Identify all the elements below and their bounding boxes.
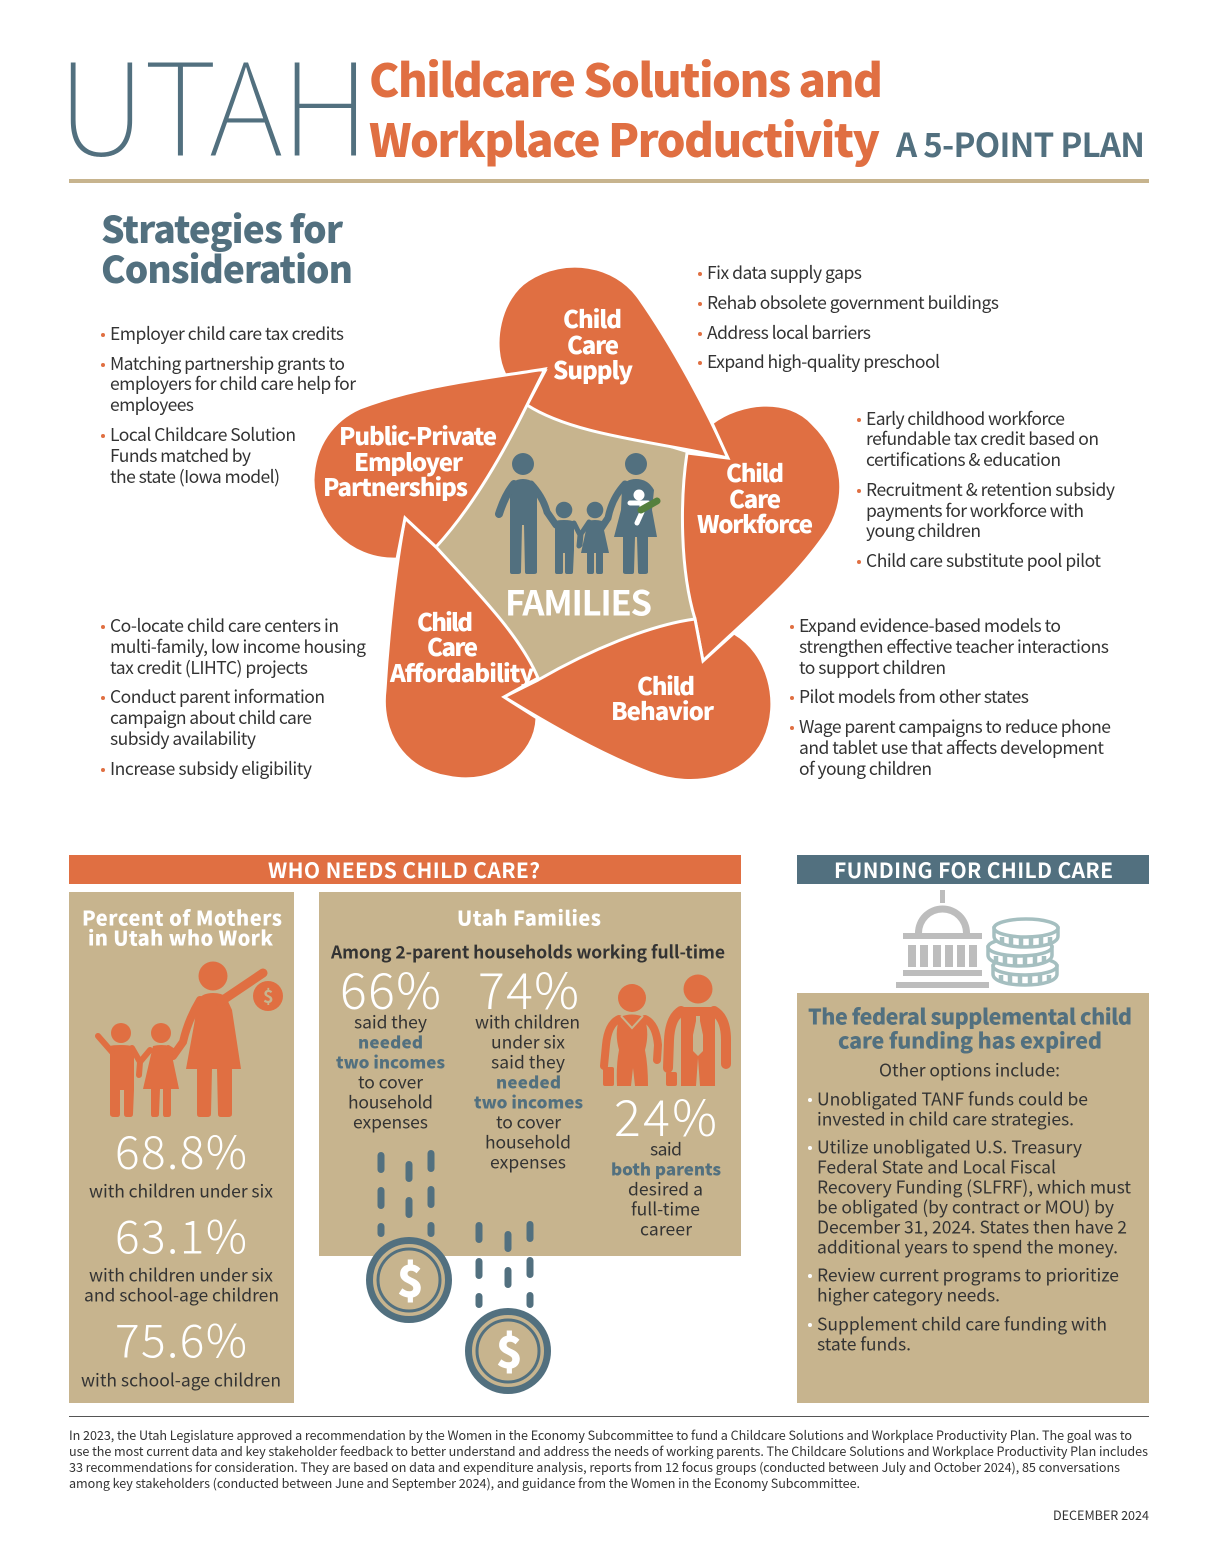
panel heading: care funding has expired — [838, 1024, 1102, 1056]
footer note: 33 recommendations for consideration. They are based on data and expenditure analysis, reports from 12 focus groups (conducted between July and October 2024), 85 conversations — [69, 1457, 1120, 1476]
petal: child care workforce: Workforce — [697, 505, 813, 540]
center panel: families — [436, 405, 695, 680]
funding bullets: Supplement child care funding with — [817, 1312, 1107, 1336]
panel heading: Percent of Mothers — [82, 902, 282, 932]
stat: 24%: 24% — [614, 1079, 717, 1151]
five-point diagram — [313, 266, 841, 781]
stat: 74%: needed — [496, 1068, 561, 1094]
stat: 74% — [474, 952, 583, 1174]
bullets: child behavior: and tablet use that affects development — [799, 735, 1104, 760]
icon: falling coin two: $ — [496, 1317, 523, 1381]
petal: child care supply: Supply — [553, 351, 634, 386]
petal: child behavior — [504, 619, 772, 781]
bullets: child care affordability: subsidy availability — [110, 726, 256, 751]
bullets: employer partnerships: the state (Iowa model) — [110, 464, 280, 489]
bullets: child care workforce — [857, 406, 1115, 573]
footer note: use the most current data and key stakeholder feedback to better understand and address the needs of working parents. The Childcare Solutions and Workplace Productivity Plan includes — [69, 1441, 1148, 1460]
petal: child care workforce: Child — [726, 454, 784, 489]
petal: child care workforce: Care — [729, 480, 781, 515]
funding bullets: additional years to spend the money. — [817, 1234, 1118, 1260]
funding bullets: state funds. — [817, 1332, 911, 1356]
bullets: child care affordability: campaign about child care — [110, 705, 312, 730]
petal: public-private employer partnerships: Public-Private — [339, 417, 497, 452]
icon: coin stack — [988, 919, 1058, 985]
bullets: child care affordability — [101, 613, 366, 781]
bullets: employer partnerships: Funds matched by — [110, 443, 251, 468]
main title — [369, 45, 883, 171]
panel heading — [808, 1000, 1132, 1056]
heading: strategies: Strategies for — [101, 200, 344, 254]
intro line: Other options include: — [879, 1058, 1060, 1082]
stat: 63.1%: and school-age children — [84, 1282, 279, 1308]
icon: mother and children — [98, 962, 283, 1117]
stat: 24%: full-time — [631, 1196, 700, 1222]
bullets: child care affordability: Co-locate child care centers in — [110, 613, 339, 638]
stat: 74%: 74% — [478, 952, 579, 1024]
stat: 68.8% — [89, 1117, 273, 1204]
icon: working parents — [603, 974, 726, 1086]
stat: 68.8%: with children under six — [89, 1178, 273, 1204]
stat: 24%: career — [640, 1216, 692, 1242]
petal: child behavior: Child — [637, 667, 695, 702]
heading: strategies — [101, 200, 353, 294]
bullets: child behavior: Expand evidence-based models to — [799, 613, 1061, 638]
funding bullets: Review current programs to prioritize — [817, 1262, 1119, 1288]
stat: 66% — [336, 952, 445, 1134]
icon: family — [499, 453, 657, 574]
bullets: child behavior: of young children — [799, 756, 932, 781]
bullets: employer partnerships: employers for child care help for — [110, 371, 356, 396]
stat: 75.6%: 75.6% — [115, 1306, 247, 1372]
funding bullets: higher category needs. — [817, 1282, 1000, 1308]
icon: falling coin two — [468, 1224, 548, 1390]
bullets: child care supply: Rehab obsolete government buildings — [707, 290, 999, 315]
petal: child care supply: Child — [563, 300, 622, 335]
petal: child care supply: Care — [567, 326, 619, 361]
bullets: child care affordability: Increase subsidy eligibility — [110, 756, 312, 781]
petal: child care supply — [498, 266, 728, 458]
icon: mother and children: $ — [263, 983, 274, 1009]
panel: utah families — [319, 892, 741, 1256]
stat: 74%: expenses — [490, 1150, 566, 1174]
icon: capitol building — [896, 890, 989, 988]
bullets: employer partnerships: Employer child care tax credits — [110, 321, 344, 346]
stat: 68.8%: 68.8% — [115, 1117, 247, 1183]
petal: public-private employer partnerships: Partnerships — [323, 468, 468, 503]
stat: 74%: under six — [491, 1030, 565, 1054]
stat: 74%: said they — [491, 1050, 565, 1074]
stat: 74%: two incomes — [474, 1088, 583, 1114]
bullets: child behavior: to support children — [799, 655, 946, 680]
footer note — [69, 1425, 1148, 1492]
main title: Workplace Productivity — [369, 105, 880, 171]
funding bullets: be obligated (by contract or MOU) by — [817, 1194, 1114, 1220]
panel subheading: Among 2-parent households working full-time — [330, 940, 725, 964]
bullets: child care workforce: Child care substitute pool pilot — [866, 548, 1101, 573]
bullets: child care workforce: young children — [866, 518, 981, 543]
petal: child care affordability: Child — [417, 603, 473, 638]
funding bullets: Federal State and Local Fiscal — [817, 1154, 1056, 1180]
panel: percent of mothers — [69, 892, 294, 1403]
bullets: child care workforce: certifications & education — [866, 447, 1061, 472]
stat: 24%: both parents — [611, 1156, 721, 1180]
stat: 63.1% — [84, 1202, 279, 1308]
stat: 66%: 66% — [340, 952, 441, 1024]
petal: child care workforce — [682, 405, 841, 661]
footer note: among key stakeholders (conducted between June and September 2024), and guidance from the Women in the Economy Subcommittee. — [69, 1473, 860, 1492]
bullets: child care workforce: refundable tax credit based on — [866, 426, 1099, 451]
funding bullets: Recovery Funding (SLFRF), which must — [817, 1174, 1131, 1200]
heading: strategies: Consideration — [101, 240, 353, 294]
icon: falling coin one — [370, 1154, 448, 1320]
stat: 24% — [611, 1079, 721, 1242]
stat: 24%: desired a — [628, 1176, 703, 1202]
petal: public-private employer partnerships — [313, 369, 545, 559]
section header: who needs child care — [69, 855, 741, 885]
bullets: child behavior — [790, 613, 1111, 781]
bullets: child behavior: Pilot models from other states — [799, 684, 1029, 709]
funding bullets: invested in child care strategies. — [817, 1106, 1074, 1132]
stat: 63.1%: with children under six — [89, 1262, 273, 1288]
stat: 66%: two incomes — [336, 1048, 445, 1074]
bullets: child care affordability: tax credit (LIHTC) projects — [110, 655, 308, 680]
bullets: child care supply — [698, 260, 999, 374]
bullets: child care supply: Fix data supply gaps — [707, 260, 862, 285]
panel heading: The federal supplemental child — [808, 1000, 1132, 1032]
bullets: employer partnerships — [101, 321, 356, 489]
section header: who needs child care: WHO NEEDS CHILD CARE? — [268, 855, 540, 885]
funding bullets: Unobligated TANF funds could be — [817, 1086, 1088, 1112]
funding bullets — [808, 1086, 1131, 1356]
stat: 75.6% — [81, 1306, 281, 1392]
bullets: employer partnerships: Matching partnership grants to — [110, 351, 345, 376]
subtitle: A 5-POINT PLAN — [895, 119, 1145, 167]
stat: 24%: said — [650, 1136, 682, 1162]
funding bullets: December 31, 2024. States then have 2 — [817, 1214, 1127, 1240]
panel heading: Utah Families — [457, 902, 601, 932]
stat: 66%: household — [348, 1090, 433, 1114]
petal: child care affordability: Affordability — [389, 654, 534, 689]
icon: falling coin one: $ — [397, 1246, 424, 1310]
bullets: child care supply: Address local barriers — [707, 320, 871, 345]
date: DECEMBER 2024 — [1053, 1505, 1149, 1524]
funding bullets: Utilize unobligated U.S. Treasury — [817, 1134, 1082, 1160]
bullets: child care workforce: Recruitment & retention subsidy — [866, 477, 1115, 502]
stat: 66%: needed — [358, 1028, 423, 1054]
stat: 74%: with children — [475, 1010, 580, 1034]
bullets: child behavior: strengthen effective teacher interactions — [799, 634, 1109, 659]
stat: 66%: said they — [354, 1010, 427, 1034]
stat: 66%: expenses — [353, 1110, 428, 1134]
bullets: child care supply: Expand high-quality preschool — [707, 349, 940, 374]
bullets: child behavior: Wage parent campaigns to reduce phone — [799, 714, 1111, 739]
panel heading — [82, 902, 282, 952]
petal: child care affordability — [384, 518, 538, 779]
bullets: child care affordability: Conduct parent information — [110, 684, 325, 709]
petal: public-private employer partnerships: Employer — [354, 443, 464, 478]
stat: 63.1%: 63.1% — [115, 1202, 247, 1268]
stat: 74%: to cover — [496, 1110, 561, 1134]
petal: child care affordability: Care — [427, 628, 478, 663]
header title — [57, 8, 1145, 192]
section header: funding: FUNDING FOR CHILD CARE — [834, 855, 1113, 885]
bullets: child care workforce: Early childhood workforce — [866, 406, 1065, 431]
panel heading: in Utah who Work — [88, 922, 273, 952]
bullets: employer partnerships: employees — [110, 392, 194, 417]
bullets: child care workforce: payments for workforce with — [866, 498, 1084, 523]
petal: child behavior: Behavior — [611, 692, 715, 727]
footer note: In 2023, the Utah Legislature approved a recommendation by the Women in the Economy Subcommittee to fund a Childcare Solutions and Workplace Productivity Plan. The goal was to — [69, 1425, 1132, 1444]
label: families: FAMILIES — [505, 576, 652, 626]
stat: 66%: to cover — [358, 1070, 423, 1094]
panel: federal funding — [797, 993, 1149, 1403]
bullets: child care affordability: multi-family, low income housing — [110, 634, 366, 659]
main title: Childcare Solutions and — [369, 45, 883, 111]
stat: 75.6%: with school-age children — [81, 1368, 281, 1392]
wordmark: UTAH: UTAH — [57, 8, 370, 192]
bullets: employer partnerships: Local Childcare Solution — [110, 422, 296, 447]
stat: 74%: household — [485, 1130, 571, 1154]
